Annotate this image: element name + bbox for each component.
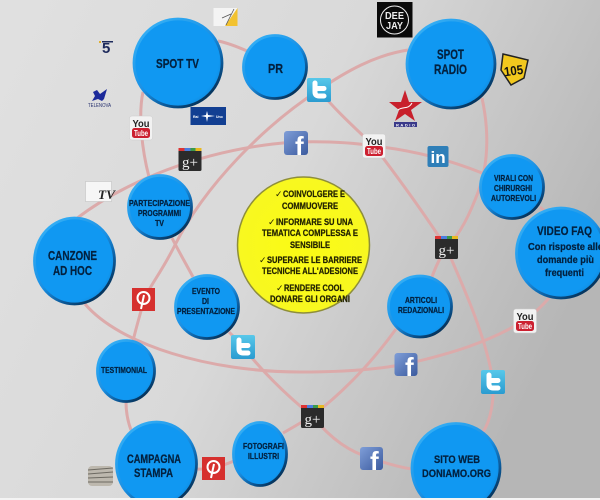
icon: youtube (right): Tube [518, 322, 532, 331]
logo: rai uno: Rai [193, 115, 198, 119]
node: canzone ad hoc: AD HOC [53, 263, 92, 278]
node: fotografi illustri [234, 422, 286, 486]
logo: rai uno [190, 107, 226, 125]
icon: youtube (left): Tube [134, 129, 148, 138]
central yellow circle: objectives: SUPERARE LE BARRIERE [267, 255, 362, 266]
node: video faq: frequenti [545, 267, 584, 279]
node: partecipazione programmi tv [128, 176, 192, 238]
icon: facebook (middle): f [405, 352, 414, 382]
node: campagna stampa: STAMPA [134, 468, 173, 480]
icon: google plus (bottom): g+ [304, 412, 320, 428]
logo: radio 105 [501, 54, 528, 85]
node: sito web [412, 424, 500, 500]
icon: google plus (center): g+ [438, 243, 454, 259]
icon: facebook (top): f [295, 131, 304, 161]
node: partecipazione programmi tv: PARTECIPAZIONE [129, 198, 190, 208]
icon: facebook (bottom): f [370, 446, 379, 476]
icon: google plus (left) [178, 148, 202, 171]
icon: youtube (left): You [132, 119, 150, 130]
node: virali: CHIRURGHI [494, 183, 532, 193]
central yellow circle: objectives: COINVOLGERE E [283, 189, 345, 200]
node: canzone ad hoc: CANZONE [48, 248, 97, 263]
logo: telenova: TELENOVA [88, 103, 112, 109]
icon: facebook (middle) [394, 352, 418, 382]
central yellow circle: objectives: RENDERE COOL [284, 283, 344, 294]
icon: facebook (top) [284, 131, 308, 161]
icon: youtube (center): You [366, 137, 382, 148]
node: virali [480, 156, 544, 218]
logo: mtv [86, 182, 116, 202]
icon: google plus (center) [435, 236, 458, 259]
icon: pinterest (left) [132, 288, 155, 311]
node: spot radio: SPOT [437, 47, 465, 62]
node: articoli redazionali: REDAZIONALI [398, 305, 444, 315]
central yellow circle: objectives: ✓ [259, 256, 267, 266]
orbit connector lines [76, 41, 549, 469]
node: video faq [516, 208, 600, 298]
node: pr: PR [268, 61, 284, 76]
icon: twitter (top) [307, 78, 331, 102]
bottom edge [0, 498, 600, 500]
icon: google plus (left): g+ [182, 155, 198, 171]
icon: twitter (evento) [231, 335, 255, 359]
node: partecipazione programmi tv: TV [155, 218, 164, 228]
logo: telenova [88, 89, 112, 109]
icon: newspapers [88, 466, 113, 486]
logo: canale 5 [99, 40, 113, 57]
node: evento di presentazione: PRESENTAZIONE [177, 306, 235, 316]
node: spot radio: RADIO [434, 62, 467, 77]
node: fotografi illustri: FOTOGRAFI [243, 441, 284, 451]
logo: italia 1 [214, 8, 238, 26]
central yellow circle: objectives: TECNICHE ALL'ADESIONE [262, 266, 358, 277]
logo: radio deejay: JAY [386, 21, 403, 32]
central yellow circle: objectives: ✓ [275, 190, 283, 200]
icon: linkedin: in [430, 148, 446, 167]
icon: google plus (bottom) [301, 405, 324, 428]
icon: twitter (right) [481, 370, 505, 394]
node: campagna stampa: CAMPAGNA [127, 454, 181, 466]
central yellow circle: objectives: ✓ [268, 218, 276, 228]
node: articoli redazionali: ARTICOLI [405, 295, 437, 305]
icon: youtube (right): You [516, 312, 534, 323]
node: virali: VIRALI CON [494, 173, 533, 183]
central yellow circle: objectives: SENSIBILE [290, 240, 330, 251]
logo: canale 5: 5 [102, 40, 110, 57]
logo: radio 105: 105 [503, 62, 524, 79]
logo: rai uno: Uno [216, 115, 223, 119]
icon: facebook (bottom) [360, 446, 383, 476]
node: testimonial: TESTIMONIAL [101, 365, 147, 375]
icon: pinterest (bottom) [202, 457, 225, 480]
logo: virgin radio [389, 90, 422, 128]
node: canzone ad hoc [34, 218, 114, 304]
node: pr [244, 36, 306, 98]
logo: virgin radio: RADIO [396, 122, 415, 128]
logo: mtv: TV [98, 187, 116, 202]
node: testimonial [98, 340, 154, 402]
node: articoli redazionali [388, 276, 452, 337]
node: campagna stampa [116, 422, 196, 500]
icon: youtube (center): Tube [367, 147, 381, 156]
central yellow circle: objectives: INFORMARE SU UNA [276, 217, 353, 228]
central yellow circle: objectives [238, 177, 370, 313]
node: spot tv: SPOT TV [156, 56, 199, 71]
node: spot radio [407, 20, 495, 108]
icon: youtube (right) [514, 309, 536, 333]
icon: linkedin [428, 146, 448, 167]
logo: radio deejay [377, 2, 412, 38]
node: virali: AUTOREVOLI [491, 193, 536, 203]
logo: radio deejay: DEE [385, 11, 404, 22]
icon: youtube (left) [130, 116, 152, 140]
node: evento di presentazione: DI [202, 296, 209, 306]
central yellow circle: objectives: TEMATICA COMPLESSA E [262, 228, 358, 239]
central yellow circle: objectives: ✓ [276, 284, 284, 294]
node: fotografi illustri: ILLUSTRI [248, 451, 279, 461]
node: partecipazione programmi tv: PROGRAMMI [138, 208, 181, 218]
icon: youtube (center) [362, 134, 386, 158]
central yellow circle: objectives: DONARE GLI ORGANI [270, 294, 350, 305]
node: evento di presentazione: EVENTO [192, 286, 220, 296]
central yellow circle: objectives: COMMUOVERE [282, 201, 338, 212]
node: sito web: SITO WEB [434, 454, 480, 466]
node: spot tv [134, 19, 222, 107]
node: evento di presentazione [176, 276, 238, 338]
node: sito web: DONIAMO.ORG [422, 468, 491, 480]
